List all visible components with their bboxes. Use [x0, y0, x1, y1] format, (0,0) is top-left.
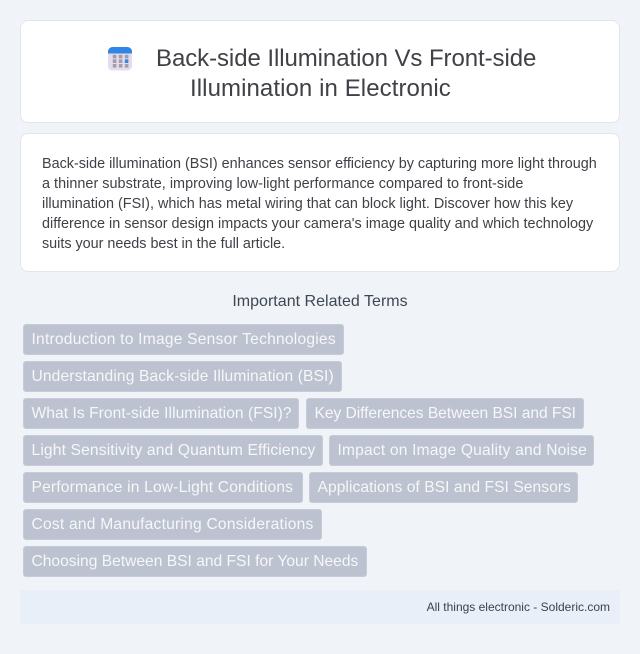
title	[156, 45, 536, 102]
tag	[23, 361, 342, 392]
tag: Applications of BSI and FSI Sensors	[318, 479, 571, 496]
panel: title card	[20, 20, 620, 123]
tag	[23, 398, 299, 429]
summary text: illumination (FSI), which has metal wiring that can block light. Discover how this key	[42, 196, 573, 212]
footer bar	[20, 590, 620, 624]
icon: calendar	[108, 47, 132, 70]
tag	[309, 472, 578, 503]
tag list	[23, 324, 594, 577]
summary text: suits your needs best in the full article.	[42, 236, 285, 252]
tag: Understanding Back-side Illumination (BSI)	[32, 368, 334, 385]
summary text: Back-side illumination (BSI) enhances sensor efficiency by capturing more light through	[42, 156, 597, 172]
tag: Key Differences Between BSI and FSI	[314, 405, 576, 422]
title: Illumination in Electronic	[190, 75, 451, 102]
tag	[306, 398, 584, 429]
tag	[23, 546, 367, 577]
summary text	[42, 156, 597, 252]
tag: Choosing Between BSI and FSI for Your Needs	[32, 553, 358, 570]
tag	[23, 435, 323, 466]
tag: Cost and Manufacturing Considerations	[32, 516, 314, 533]
panel: summary card	[20, 133, 620, 272]
heading: related terms: Important Related Terms	[232, 293, 408, 310]
tag: Performance in Low-Light Conditions	[32, 479, 293, 496]
tag	[23, 324, 344, 355]
title: Back-side Illumination Vs Front-side	[156, 45, 536, 72]
tag	[329, 435, 594, 466]
tag: Impact on Image Quality and Noise	[338, 442, 587, 459]
footer text: All things electronic - Solderic.com	[427, 600, 610, 614]
tag: Light Sensitivity and Quantum Efficiency	[32, 442, 315, 459]
tag: Introduction to Image Sensor Technologies	[32, 331, 336, 348]
tag: What Is Front-side Illumination (FSI)?	[32, 405, 292, 422]
tag	[23, 509, 322, 540]
tag	[23, 472, 303, 503]
summary text: difference in sensor design impacts your camera's image quality and which technology	[42, 216, 593, 232]
summary text: a thinner substrate, improving low-light performance compared to front-side	[42, 176, 523, 192]
